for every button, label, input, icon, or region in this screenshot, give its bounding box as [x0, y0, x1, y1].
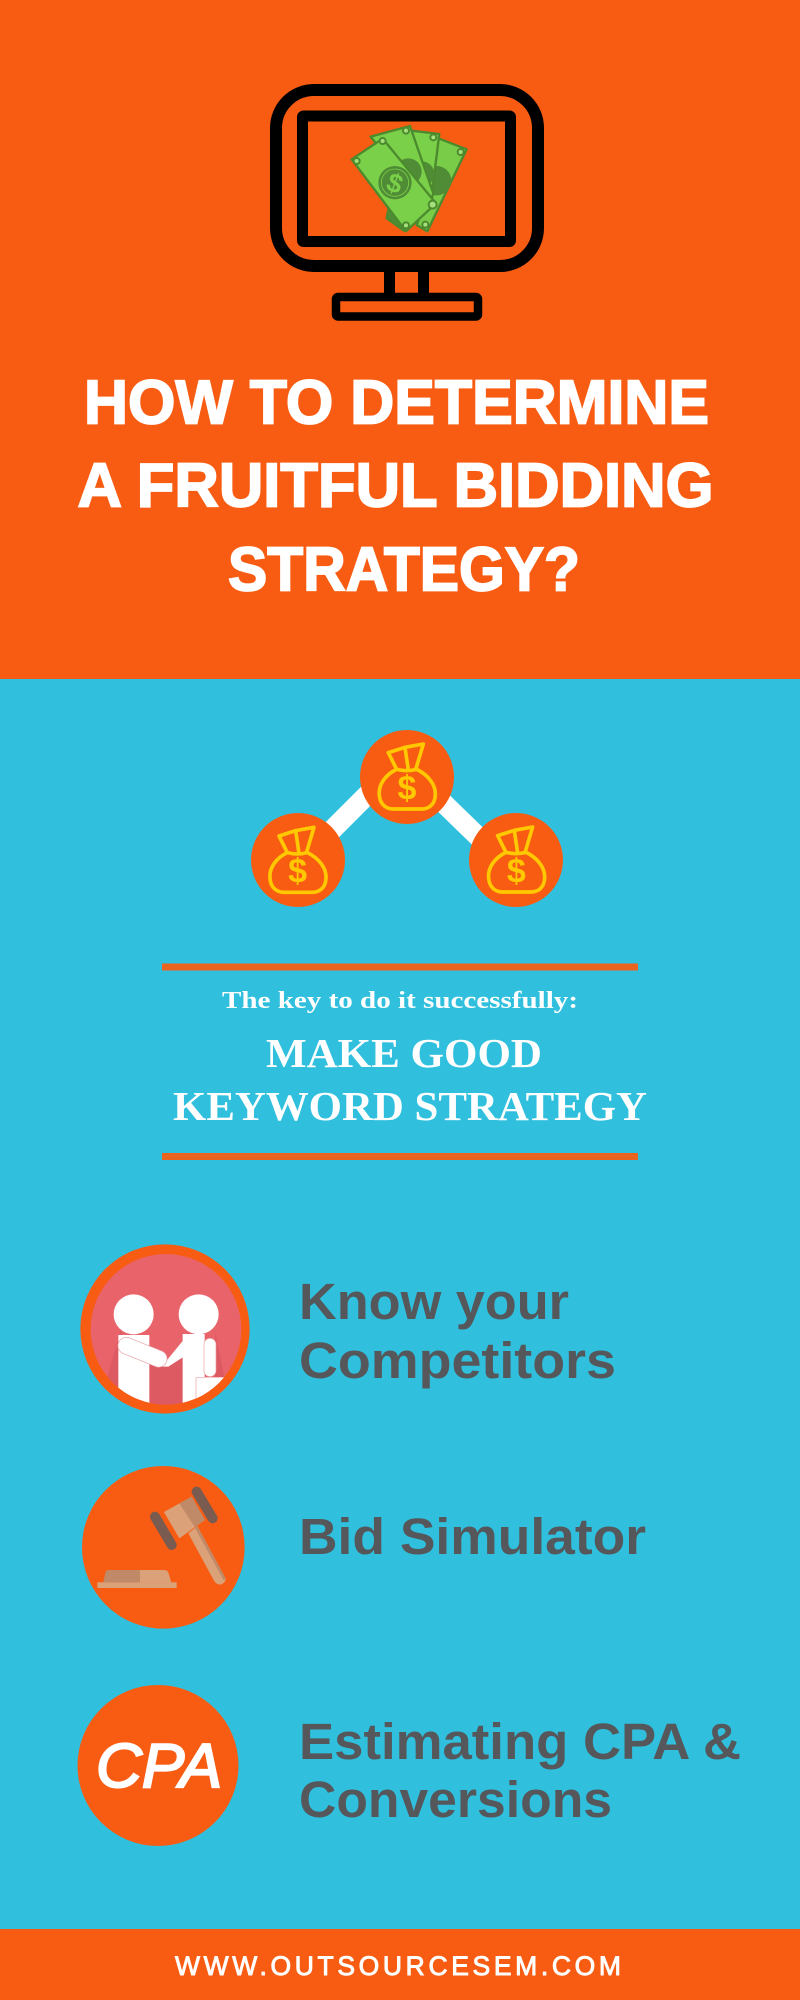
- footer: [0, 1929, 800, 2000]
- text: estimating cpa and conversions: Estimating CPA &: [299, 1713, 741, 1770]
- title: STRATEGY?: [228, 536, 580, 604]
- subheading: The key to do it successfully:: [222, 988, 578, 1014]
- icon: computer monitor with money: [276, 90, 538, 316]
- item: know your competitors: [80, 1244, 616, 1414]
- title: A FRUITFUL BIDDING: [78, 452, 714, 520]
- icon: connected money bags: [251, 730, 563, 907]
- text: know your competitors: Know your: [299, 1273, 569, 1330]
- icon: cpa badge: [78, 1685, 238, 1846]
- text: know your competitors: Competitors: [299, 1332, 616, 1389]
- icon: handshake: [80, 1244, 250, 1414]
- heading: make good keyword strategy: MAKE GOOD: [266, 1030, 542, 1076]
- title: [78, 368, 714, 604]
- text: know your competitors: [299, 1273, 616, 1389]
- item: bid simulator: [82, 1466, 646, 1629]
- text: bid simulator: Bid Simulator: [299, 1508, 646, 1565]
- icon: banknotes: [352, 126, 467, 231]
- icon: connected money bags: $: [398, 769, 417, 807]
- panel: keyword strategy: [78, 730, 740, 1846]
- item: estimating cpa and conversions: [78, 1685, 741, 1846]
- icon: connected money bags: $: [507, 852, 526, 890]
- footer: WWW.OUTSOURCESEM.COM: [175, 1951, 621, 1981]
- text: estimating cpa and conversions: Conversions: [299, 1771, 612, 1828]
- icon: gavel: [82, 1466, 245, 1629]
- icon: connected money bags: $: [288, 853, 307, 891]
- icon: cpa badge: CPA: [96, 1732, 222, 1801]
- title: HOW TO DETERMINE: [84, 368, 709, 438]
- heading: make good keyword strategy: KEYWORD STRATEGY: [173, 1083, 647, 1129]
- panel: header: [0, 0, 800, 679]
- text: estimating cpa and conversions: [299, 1713, 741, 1828]
- icon: banknotes: $: [383, 167, 407, 200]
- heading: make good keyword strategy: [173, 1030, 647, 1129]
